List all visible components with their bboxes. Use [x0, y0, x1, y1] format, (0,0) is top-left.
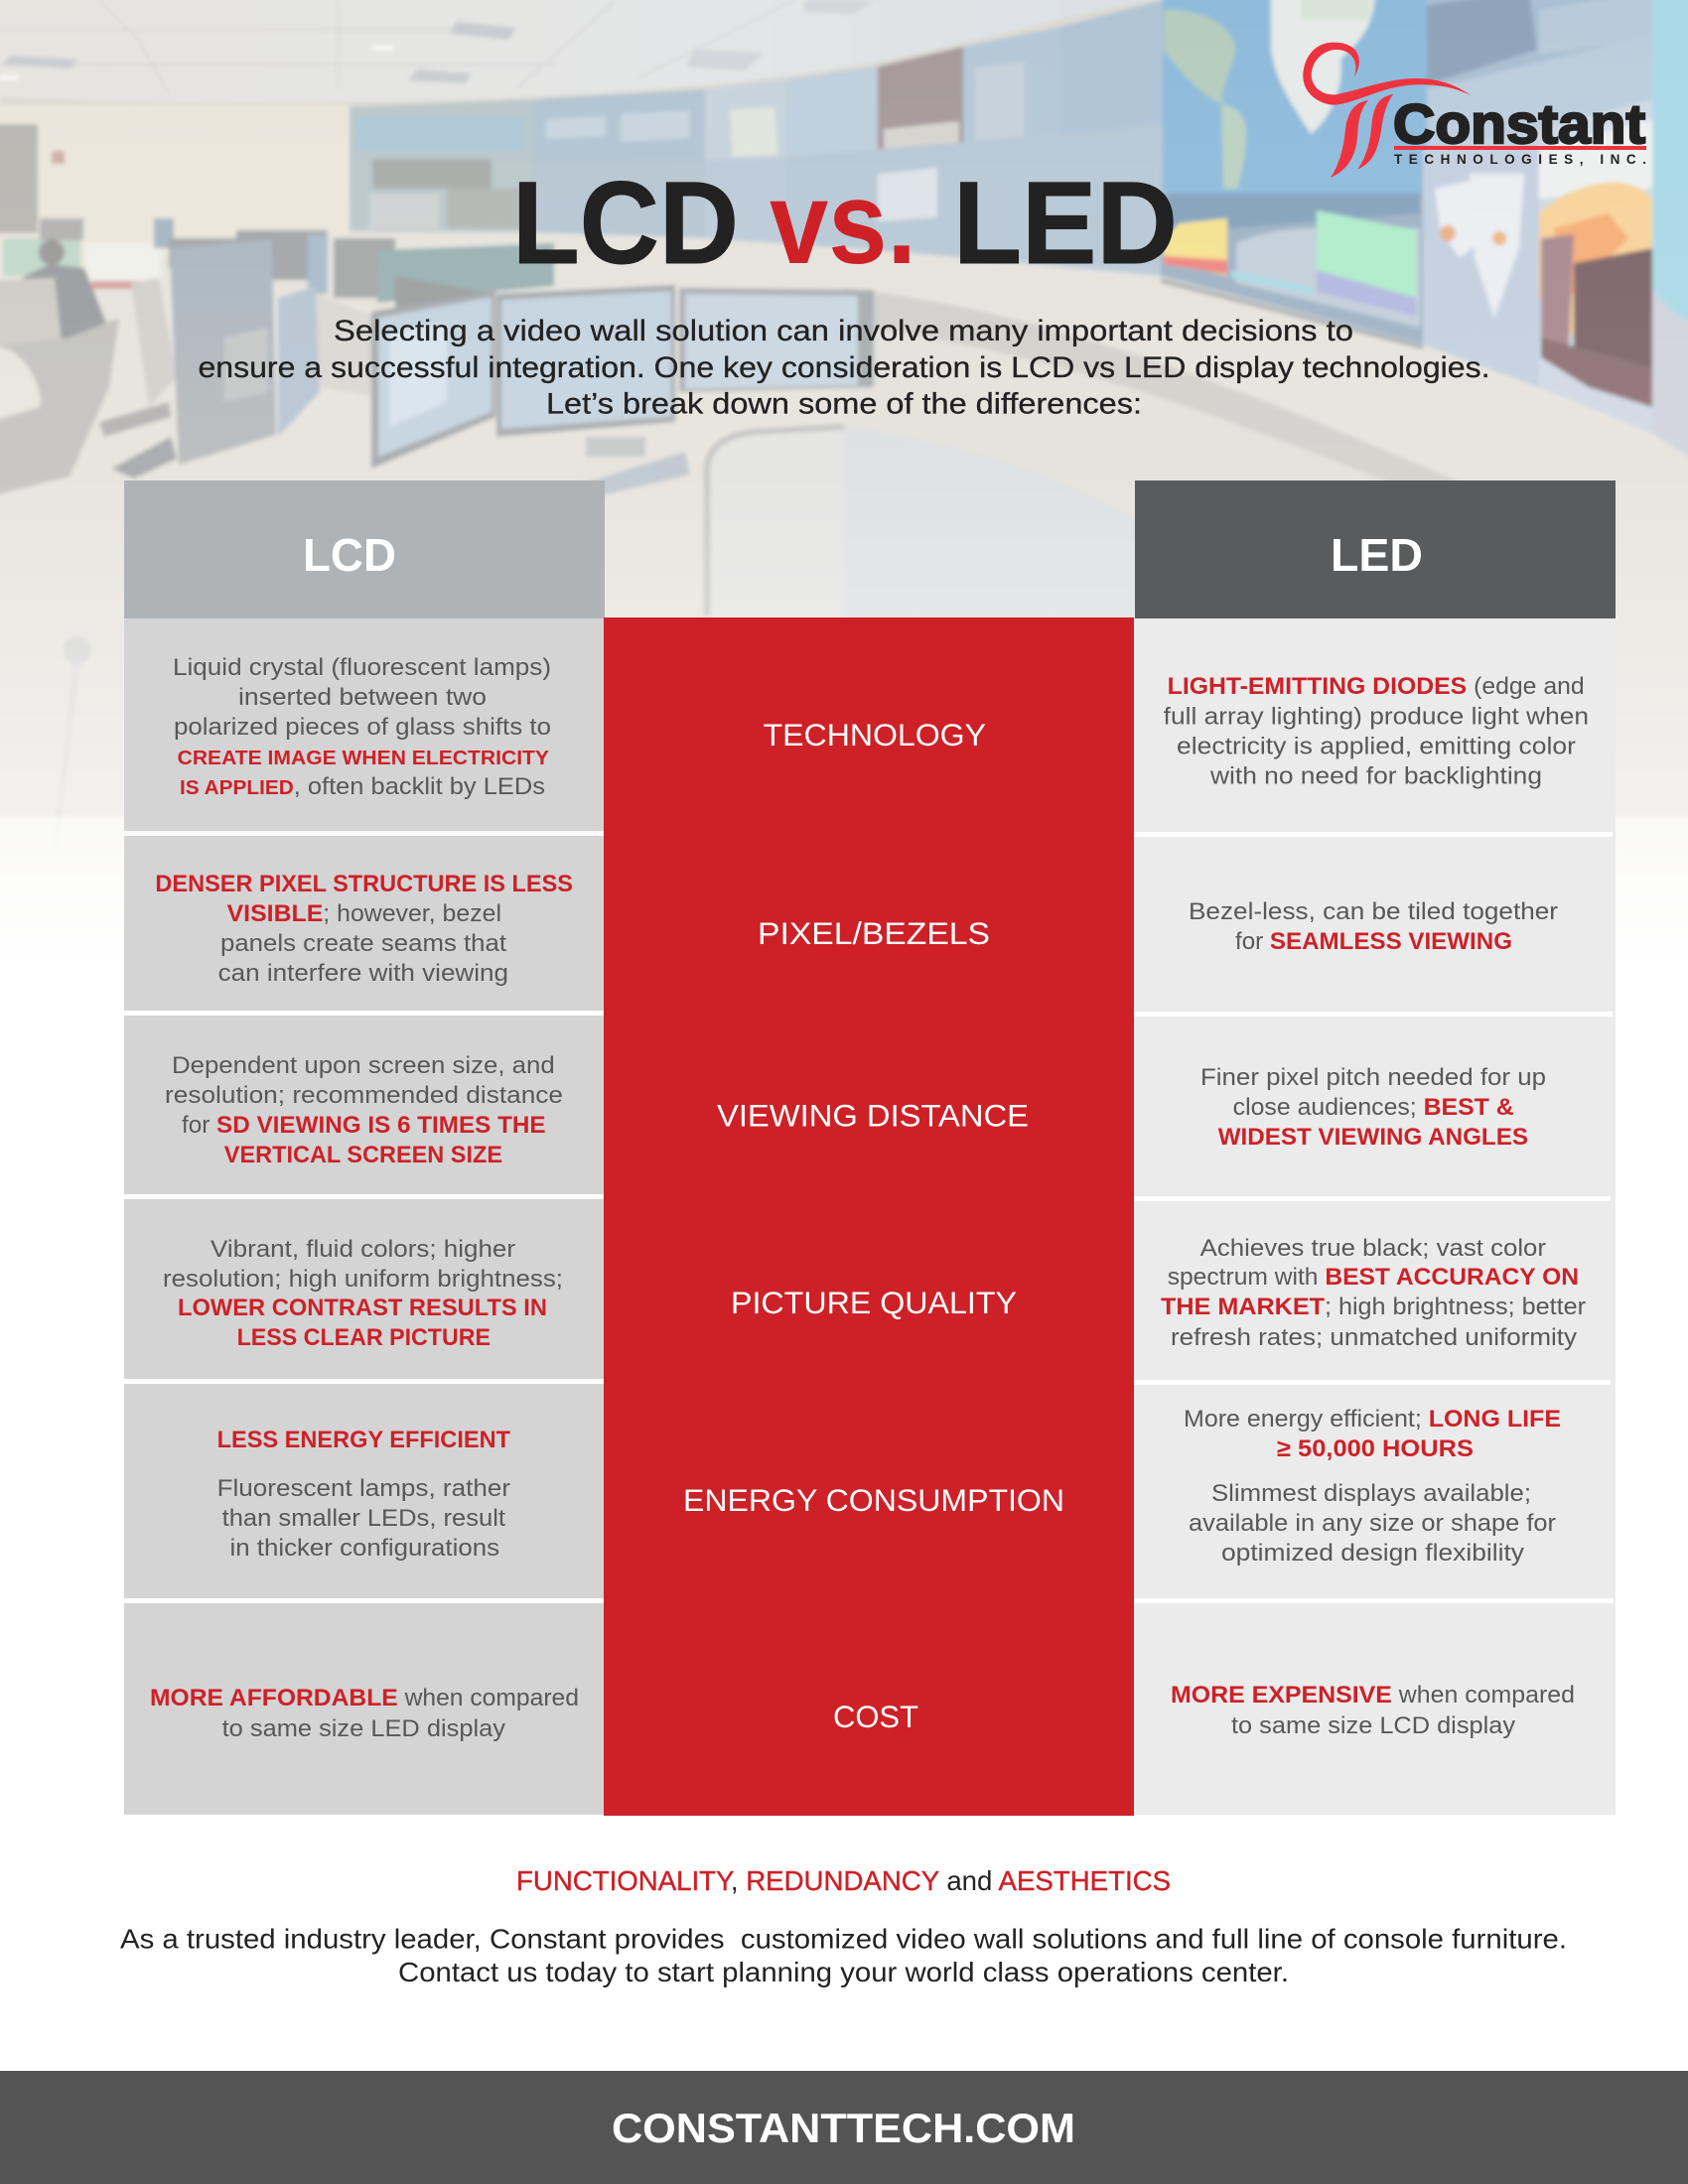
LED row: viewing distance: WIDEST VIEWING ANGLES — [1218, 1124, 1528, 1151]
title: vs. — [770, 158, 916, 289]
LCD row: picture quality: Vibrant, fluid colors; higher — [211, 1236, 515, 1263]
LCD row: viewing distance: resolution; recommended distance — [165, 1082, 563, 1109]
desk items — [111, 437, 177, 478]
LCD header — [124, 480, 605, 618]
LED row: pixel/bezels: for SEAMLESS VIEWING — [1235, 928, 1512, 955]
category: cost: COST — [833, 1699, 918, 1734]
LED row: picture quality — [1161, 1235, 1586, 1351]
background photo: control room with curved video wall — [0, 0, 1688, 1003]
logo: Constant Technologies — [1303, 43, 1646, 178]
LCD row: energy consumption: in thicker configurations — [230, 1535, 499, 1562]
LED row: viewing distance: Finer pixel pitch needed for up — [1200, 1064, 1546, 1091]
LCD row: technology: CREATE IMAGE WHEN ELECTRICITY — [178, 748, 550, 769]
LED row: cost: to same size LCD display — [1231, 1712, 1516, 1739]
LED row: energy consumption: available in any size or shape for — [1189, 1510, 1556, 1537]
LED row: energy consumption — [1184, 1406, 1561, 1567]
intro text: ensure a successful integration. One key consideration is LCD vs LED display technologies. — [199, 351, 1489, 384]
LCD row: energy consumption — [124, 1384, 604, 1598]
intro text — [199, 315, 1489, 421]
category: energy consumption: ENERGY CONSUMPTION — [683, 1482, 1064, 1518]
LCD row: pixel/bezels — [124, 836, 604, 1011]
center monitors — [377, 243, 554, 303]
category: viewing distance: VIEWING DISTANCE — [717, 1098, 1029, 1134]
LED row: energy consumption: optimized design flexibility — [1221, 1540, 1525, 1567]
LED row: picture quality: refresh rates; unmatched uniformity — [1171, 1324, 1578, 1351]
LED row: picture quality: spectrum with BEST ACCURACY ON — [1168, 1264, 1579, 1291]
intro text: Selecting a video wall solution can involve many important decisions to — [334, 315, 1353, 347]
category: technology: TECHNOLOGY — [764, 717, 986, 752]
LED row: picture quality: THE MARKET; high brightness; better — [1161, 1294, 1586, 1320]
LED row: technology: with no need for backlighting — [1209, 762, 1542, 790]
desks — [0, 231, 1688, 993]
LED row: energy consumption: Slimmest displays available; — [1211, 1480, 1531, 1507]
LCD row: picture quality: LOWER CONTRAST RESULTS IN — [178, 1295, 547, 1321]
panel: LCD column — [124, 480, 605, 1815]
video wall base — [350, 0, 1688, 463]
panel: red category column — [604, 617, 1134, 1816]
closing paragraph: As a trusted industry leader, Constant provides customized video wall solutions and full line of console furniture. — [120, 1924, 1567, 1954]
LCD row: technology — [124, 618, 604, 831]
footer bar: CONSTANTTECH.COM — [612, 2105, 1075, 2151]
LED row: cost — [1171, 1682, 1575, 1739]
panel: LED column — [1134, 480, 1616, 1815]
closing paragraph: Contact us today to start planning your world class operations center. — [398, 1957, 1289, 1987]
LCD row: pixel/bezels: panels create seams that — [220, 930, 506, 957]
closing paragraph — [120, 1924, 1567, 1987]
LED row: technology — [1164, 673, 1589, 790]
LCD row: viewing distance: for SD VIEWING IS 6 TIMES THE — [182, 1112, 546, 1139]
far workstation — [3, 238, 80, 276]
LED row: picture quality: Achieves true black; vast color — [1200, 1235, 1546, 1262]
LCD row: picture quality: LESS CLEAR PICTURE — [237, 1324, 491, 1351]
LCD row: technology: Liquid crystal (fluorescent lamps) — [173, 654, 551, 681]
right panels — [1427, 0, 1688, 149]
title: LCD — [512, 158, 739, 289]
LCD row: technology: IS APPLIED, often backlit by LEDs — [180, 773, 545, 800]
LED header: LED — [1331, 529, 1423, 581]
world map panel — [1163, 0, 1427, 194]
LED row: pixel/bezels — [1189, 898, 1558, 955]
LED row: pixel/bezels: Bezel-less, can be tiled together — [1189, 898, 1558, 925]
LCD row: viewing distance: VERTICAL SCREEN SIZE — [224, 1142, 502, 1168]
LCD row: cost — [124, 1603, 604, 1815]
LED row: technology: electricity is applied, emitting color — [1177, 733, 1576, 760]
LED row: energy consumption: ≥ 50,000 HOURS — [1277, 1435, 1474, 1462]
LCD row: viewing distance — [124, 1016, 604, 1194]
logo: Constant Technologies: Constant — [1393, 92, 1645, 155]
LED row: viewing distance: close audiences; BEST & — [1233, 1094, 1514, 1121]
chart band — [1161, 194, 1427, 344]
title: LED — [953, 158, 1178, 289]
LED header — [1135, 480, 1616, 618]
intro text: Let’s break down some of the differences: — [546, 387, 1142, 421]
LCD row: cost: MORE AFFORDABLE when compared — [150, 1685, 579, 1711]
LCD row: viewing distance: Dependent upon screen size, and — [172, 1052, 555, 1079]
LCD row: pixel/bezels: DENSER PIXEL STRUCTURE IS LESS — [155, 871, 573, 897]
LED row: technology: full array lighting) produce light when — [1164, 703, 1589, 731]
title — [512, 158, 1178, 289]
LCD row: technology: inserted between two — [238, 684, 487, 711]
LCD row: picture quality: resolution; high uniform brightness; — [163, 1266, 563, 1293]
LCD row: pixel/bezels: can interfere with viewing — [218, 960, 508, 987]
LCD row: energy consumption: Fluorescent lamps, rather — [217, 1475, 510, 1502]
closing tagline: FUNCTIONALITY, REDUNDANCY and AESTHETICS — [516, 1865, 1171, 1896]
LCD row: technology: polarized pieces of glass shifts to — [174, 714, 551, 741]
LCD header: LCD — [303, 529, 396, 581]
logo: Constant Technologies: TECHNOLOGIES, INC. — [1394, 152, 1646, 167]
left wall — [0, 105, 350, 284]
LED row: energy consumption: More energy efficient; LONG LIFE — [1184, 1406, 1561, 1433]
LCD row: energy consumption: than smaller LEDs, result — [222, 1505, 505, 1532]
LCD row: energy consumption: LESS ENERGY EFFICIENT — [217, 1427, 510, 1453]
LED row: technology: LIGHT-EMITTING DIODES (edge and — [1168, 673, 1585, 700]
LED row: viewing distance — [1200, 1064, 1546, 1151]
LED row: cost: MORE EXPENSIVE when compared — [1171, 1682, 1575, 1708]
LCD row: pixel/bezels: VISIBLE; however, bezel — [227, 900, 501, 927]
LCD row: cost: to same size LED display — [222, 1715, 506, 1742]
footer bar — [0, 2071, 1688, 2184]
category: picture quality: PICTURE QUALITY — [731, 1285, 1017, 1320]
LCD row: picture quality — [124, 1199, 604, 1379]
category: pixel/bezels: PIXEL/BEZELS — [758, 915, 990, 951]
